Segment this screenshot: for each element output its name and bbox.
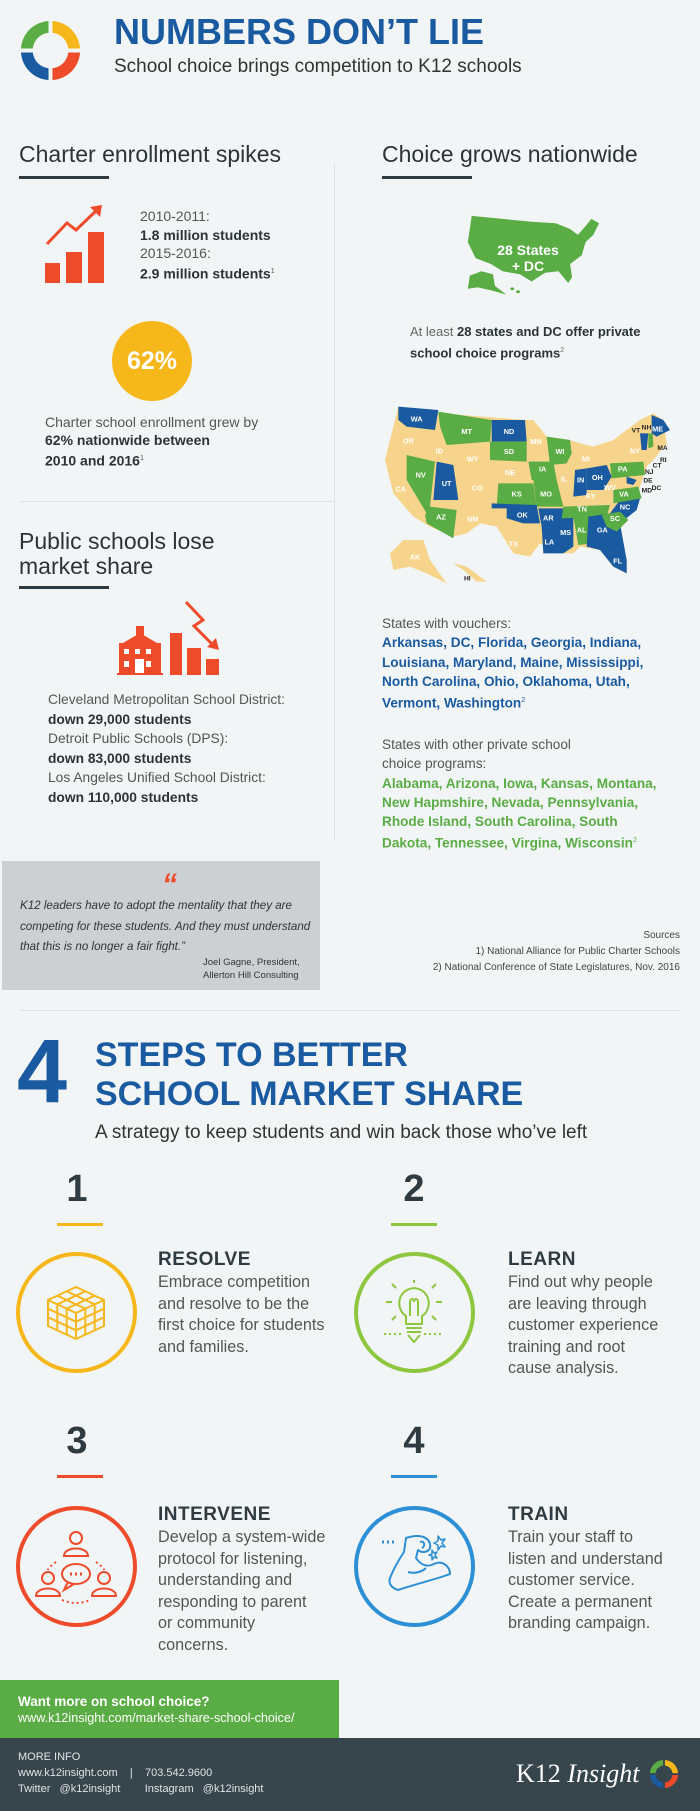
quote text: K12 leaders have to adopt the mentality that they are <box>20 899 292 912</box>
callout: want more: www.k12insight.com/market-share-school-choice/ <box>18 1711 294 1725</box>
chart: US states map: SD <box>504 447 514 456</box>
icon: people conversation <box>16 1506 137 1627</box>
horizontal divider <box>20 501 334 502</box>
text: other choice states: New Hapmshire, Nevada, Pennsylvania, <box>382 795 638 810</box>
text: voucher states <box>382 616 643 711</box>
chart: US states map: NJ <box>645 469 654 476</box>
footer contact info: MORE INFO www.k12insight.com | 703.542.9600 Twitter @k12insight Instagram @k12insight <box>18 1751 264 1795</box>
text: district losses: down 110,000 students <box>48 790 198 804</box>
chart: US states map: MO <box>540 490 552 499</box>
sources <box>433 930 680 973</box>
desc: train: listen and understand <box>508 1550 663 1568</box>
desc: intervene: understanding and <box>158 1571 292 1589</box>
text: voucher states: Arkansas, DC, Florida, Georgia, Indiana, <box>382 635 641 650</box>
chart: US states map: OH <box>592 473 603 482</box>
title: NUMBERS DON’T LIE <box>114 11 484 52</box>
quote text: that this is no longer a fair fight.” <box>20 940 185 953</box>
sources: Sources <box>643 930 680 941</box>
desc: resolve <box>158 1273 324 1356</box>
chart: US states map: OR <box>403 436 415 445</box>
text: other choice states: choice programs: <box>382 756 486 771</box>
chart: US states map: MS <box>560 528 571 537</box>
step 3: intervene <box>16 1420 325 1654</box>
step 3: intervene: 3 <box>66 1420 88 1462</box>
chart: US states map: SC <box>610 514 621 523</box>
desc: learn: training and root <box>508 1338 625 1356</box>
chart: US states map: NE <box>505 468 515 477</box>
chart: US states map: WI <box>556 447 564 456</box>
divider <box>19 1010 680 1011</box>
step 2: learn <box>354 1168 658 1377</box>
icon: flexed arm <box>354 1506 475 1627</box>
heading: public schools: market share <box>19 553 153 579</box>
text: 62% description: 62% nationwide between <box>45 432 210 448</box>
attribution: Allerton Hill Consulting <box>203 970 299 981</box>
chart: US states map: WY <box>467 455 479 464</box>
chart: US states map: UT <box>442 479 452 488</box>
chart: US states map: PA <box>618 464 628 473</box>
desc: intervene: responding to parent <box>158 1593 306 1611</box>
title: learn: LEARN <box>508 1249 576 1270</box>
text: 62% description <box>45 414 258 468</box>
chart: US states map: CT <box>653 462 662 469</box>
label: 28 states + DC <box>497 242 559 274</box>
chart: US states map: MD <box>642 487 652 494</box>
desc: intervene: or community <box>158 1614 255 1632</box>
chart: US states map: ID <box>436 446 443 455</box>
desc: train <box>508 1528 663 1632</box>
chart: US states map: ND <box>504 427 514 436</box>
footer logo icon <box>650 1760 678 1788</box>
callout: want more: Want more on school choice? <box>18 1694 210 1709</box>
chart: US states map: NY <box>630 446 640 455</box>
text: district losses <box>48 692 285 804</box>
logo icon <box>21 21 80 80</box>
chart: US states map: WA <box>411 415 423 424</box>
quote mark: “ <box>162 868 177 901</box>
desc: resolve: and families. <box>158 1338 249 1356</box>
text: enrollment numbers: 2010-2011: <box>140 208 210 224</box>
text: district losses: Los Angeles Unified School District: <box>48 770 266 785</box>
chart: US states map: AZ <box>436 512 446 521</box>
label: 28 states + DC: + DC <box>512 258 544 274</box>
icon: light bulb <box>354 1252 475 1373</box>
step 2: learn: 2 <box>403 1168 425 1210</box>
desc: train: customer service. <box>508 1571 635 1589</box>
chart: US states map: TX <box>509 540 518 549</box>
step 4: train: 4 <box>403 1420 425 1462</box>
heading: public schools: Public schools lose <box>19 528 215 554</box>
chart: US states map: WV <box>604 483 616 492</box>
chart: US states map: FL <box>613 556 623 565</box>
heading: 4 steps: SCHOOL MARKET SHARE <box>95 1075 523 1113</box>
vertical divider <box>334 163 335 841</box>
icon: rising chart <box>45 205 104 283</box>
chart: US states map: NH <box>642 424 651 431</box>
desc: learn: Find out why people <box>508 1273 653 1291</box>
text: voucher states: North Carolina, Ohio, Oklahoma, Utah, <box>382 674 630 689</box>
chart: US states map: MI <box>582 455 590 464</box>
sources: 2) National Conference of State Legislatures, Nov. 2016 <box>433 962 680 973</box>
chart: US states map: VT <box>632 428 640 435</box>
desc: train: Create a permanent <box>508 1593 652 1611</box>
chart: US states map: DE <box>643 478 653 485</box>
text: other choice states <box>382 737 656 851</box>
chart: US states map: IA <box>539 464 547 473</box>
text: district losses: Cleveland Metropolitan School District: <box>48 692 285 707</box>
text: other choice states: Alabama, Arizona, Iowa, Kansas, Montana, <box>382 776 656 791</box>
circle: 62% <box>112 321 192 401</box>
desc: learn: customer experience <box>508 1316 658 1334</box>
chart: US states map: NC <box>620 502 631 511</box>
text: district losses: down 29,000 students <box>48 712 191 726</box>
quote text: competing for these students. And they must understand <box>20 920 310 932</box>
text: other choice states: States with other private school <box>382 737 571 752</box>
chart: US states map: DC <box>652 485 661 492</box>
heading: 4 steps: STEPS TO BETTER <box>95 1036 408 1074</box>
desc: resolve: first choice for students <box>158 1316 324 1334</box>
step 4: train <box>354 1420 663 1632</box>
icon: school with falling chart <box>117 601 219 675</box>
desc: learn: cause analysis. <box>508 1359 619 1377</box>
heading: charter: Charter enrollment spikes <box>19 141 281 167</box>
attribution <box>203 957 300 981</box>
text: enrollment numbers <box>140 208 275 281</box>
title: train: TRAIN <box>508 1504 569 1525</box>
chart: US states map: NV <box>416 470 426 479</box>
text: 62% description: 2010 and 20161 <box>45 452 144 468</box>
desc: resolve: and resolve to be the <box>158 1295 309 1313</box>
subtitle: School choice brings competition to K12 schools <box>114 56 522 77</box>
text: 62% description: Charter school enrollment grew by <box>45 414 258 430</box>
text: other choice states: Rhode Island, South Carolina, South <box>382 814 618 829</box>
text: at least 28 states: school choice programs2 <box>410 345 564 360</box>
desc: learn: are leaving through <box>508 1295 647 1313</box>
text: at least 28 states <box>410 324 640 360</box>
heading: choice: Choice grows nationwide <box>382 141 638 167</box>
desc: train: branding campaign. <box>508 1614 650 1632</box>
text: district losses: Detroit Public Schools (DPS): <box>48 731 228 746</box>
text: voucher states: Vermont, Washington2 <box>382 696 525 711</box>
chart: US states map: HI <box>464 576 471 583</box>
chart: US states map: GA <box>597 526 609 535</box>
chart: US states map: RI <box>660 457 667 464</box>
chart: US states map: CA <box>395 485 407 494</box>
desc: resolve: Embrace competition <box>158 1273 310 1291</box>
chart: US states map <box>385 406 670 584</box>
title: resolve: RESOLVE <box>158 1249 251 1270</box>
chart: US states map: IL <box>561 475 568 484</box>
sources: 1) National Alliance for Public Charter Schools <box>475 946 680 957</box>
chart: US states map: LA <box>544 537 555 546</box>
text: voucher states: States with vouchers: <box>382 616 511 631</box>
footer <box>0 1738 700 1811</box>
heading: 4 steps <box>95 1036 523 1113</box>
chart: US states map: MN <box>530 437 542 446</box>
footer brand: K12 Insight <box>516 1759 640 1788</box>
heading: public schools <box>19 528 215 579</box>
chart: US states map: NM <box>467 515 478 524</box>
chart: US states map: KS <box>512 490 522 499</box>
callout: want more <box>0 1680 339 1738</box>
chart: US states map: AL <box>577 526 587 535</box>
chart: US states map: CO <box>472 484 483 493</box>
desc: intervene: Develop a system-wide <box>158 1528 325 1546</box>
chart: US states map: TN <box>577 505 587 514</box>
attribution: Joel Gagne, President, <box>203 957 300 968</box>
chart: US states map: OK <box>517 510 529 519</box>
chart: US states map: AK <box>410 552 421 561</box>
desc: intervene: protocol for listening, <box>158 1550 307 1568</box>
text: enrollment numbers: 2.9 million students1 <box>140 265 275 281</box>
text: at least 28 states: At least 28 states and DC offer private <box>410 324 640 339</box>
chart: US states map: MA <box>657 445 668 452</box>
subheading: strategy: A strategy to keep students and win back those who’ve left <box>95 1122 587 1143</box>
text: other choice states: Dakota, Tennessee, Virgina, Wisconsin2 <box>382 836 637 851</box>
icon: cube <box>16 1252 137 1373</box>
text: voucher states: Louisiana, Maryland, Maine, Mississippi, <box>382 655 643 670</box>
desc: intervene: concerns. <box>158 1636 228 1654</box>
title: intervene: INTERVENE <box>158 1504 271 1525</box>
desc: train: Train your staff to <box>508 1528 633 1546</box>
chart: US states map: IN <box>577 476 584 485</box>
desc: intervene <box>158 1528 325 1654</box>
chart: US states map: KY <box>586 492 596 501</box>
chart: US states map: AR <box>543 514 554 523</box>
icon: small green US map with label <box>468 216 599 295</box>
desc: learn <box>508 1273 658 1377</box>
callout: quote <box>2 861 320 990</box>
quote text <box>20 899 310 953</box>
text: district losses: down 83,000 students <box>48 750 191 766</box>
step 1: resolve <box>16 1168 324 1373</box>
chart: US states map: VA <box>619 490 630 499</box>
chart: US states map: MT <box>461 427 472 436</box>
big number 4: 4 <box>17 1022 67 1122</box>
circle: 62%: 62% <box>127 347 177 375</box>
chart: US states map: ME <box>652 424 663 433</box>
text: enrollment numbers: 2015-2016: <box>140 245 211 261</box>
label: 28 states + DC: 28 States <box>497 242 559 258</box>
step 1: resolve: 1 <box>66 1168 88 1210</box>
text: enrollment numbers: 1.8 million students <box>140 226 271 242</box>
